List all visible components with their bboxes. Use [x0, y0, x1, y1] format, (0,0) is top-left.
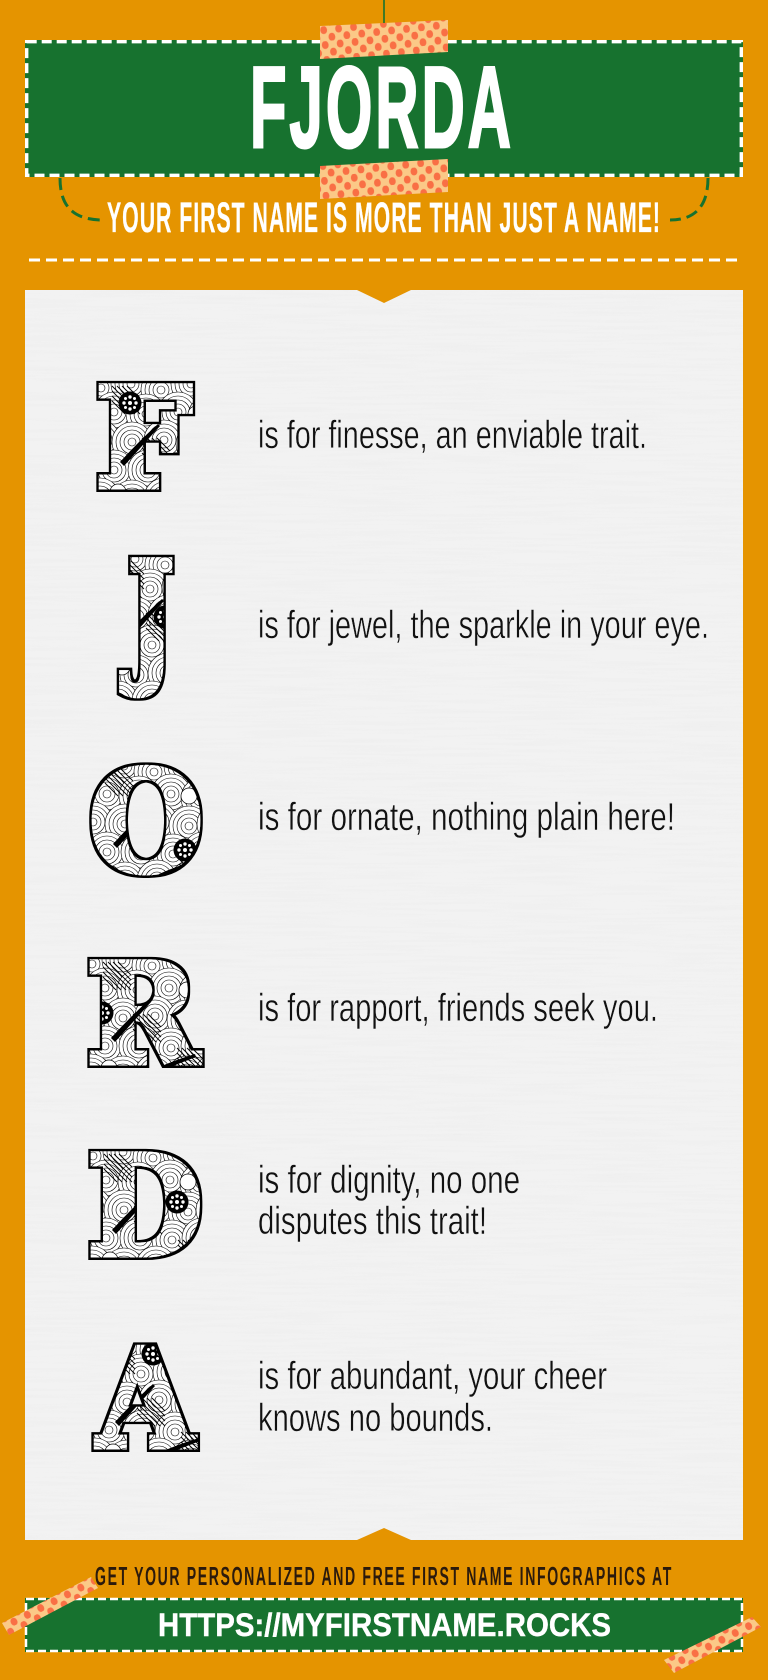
- panel: letters: [25, 290, 743, 1540]
- footer banner: [25, 1598, 743, 1652]
- hanging string: [383, 0, 385, 26]
- text D: [258, 1159, 520, 1243]
- title: FJORDA: [250, 44, 514, 172]
- letter O: O: [90, 742, 203, 903]
- tape: bottom of banner: [320, 159, 448, 199]
- dashed connector left: [60, 178, 103, 220]
- dashed connector right: [670, 178, 708, 220]
- row: J: [121, 531, 709, 699]
- row: F: [96, 359, 647, 519]
- text A: [258, 1355, 607, 1440]
- letter D: D: [88, 1127, 202, 1287]
- row: O: [90, 742, 675, 903]
- title banner: [25, 40, 743, 177]
- tape: top of banner: [320, 20, 448, 59]
- row: R: [87, 935, 658, 1095]
- letter F: F: [96, 359, 191, 519]
- row: D: [88, 1127, 520, 1287]
- text A: knows no bounds.: [258, 1397, 493, 1440]
- letter J: J: [121, 531, 174, 699]
- dashed divider: [29, 258, 739, 262]
- tape: footer left: [2, 1577, 98, 1635]
- footer url: HTTPS://MYFIRSTNAME.ROCKS: [158, 1607, 611, 1643]
- letter R: R: [87, 935, 199, 1095]
- text D: disputes this trait!: [258, 1200, 487, 1243]
- row: A: [96, 1320, 607, 1478]
- text D: is for dignity, no one: [258, 1159, 520, 1202]
- tape: footer right: [664, 1617, 761, 1673]
- letter A: A: [96, 1320, 195, 1478]
- text A: is for abundant, your cheer: [258, 1355, 607, 1398]
